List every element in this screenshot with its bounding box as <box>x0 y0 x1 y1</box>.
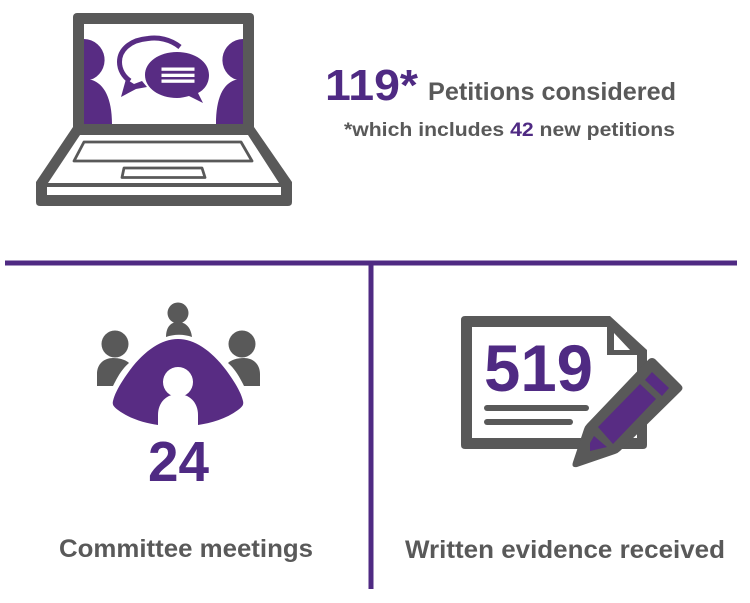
laptop base <box>36 127 292 206</box>
label: committee meetings: Committee meetings <box>59 535 313 563</box>
number: 119*: 119* <box>325 61 419 110</box>
number: 24: 24 <box>148 430 209 494</box>
vertical divider <box>368 263 374 589</box>
text lines <box>487 408 586 422</box>
number: 519: 519 <box>484 331 593 405</box>
pencil body <box>572 358 682 467</box>
icon: written evidence document and pencil <box>461 316 682 467</box>
speech bubble tail <box>121 79 147 97</box>
horizontal divider <box>5 260 737 266</box>
label: written evidence received: Written evidence received <box>405 536 725 564</box>
subheading: new petitions: *which includes 42 new petitions <box>344 119 675 141</box>
left person <box>97 330 129 386</box>
icon: committee meeting table <box>97 302 260 494</box>
meeting table <box>113 339 243 425</box>
filled speech bubble <box>145 52 209 103</box>
document <box>461 316 647 449</box>
icon: laptop with conversation <box>36 13 292 206</box>
trackpad outline <box>122 168 205 178</box>
laptop screen <box>84 24 243 124</box>
pencil eraser <box>645 372 669 396</box>
right person <box>216 39 243 124</box>
right person <box>228 330 260 386</box>
document fold <box>614 333 630 350</box>
left person <box>84 39 112 124</box>
pencil shaft <box>598 384 656 444</box>
top person <box>166 302 192 337</box>
front edge strip <box>47 187 281 195</box>
outline speech bubble <box>120 38 180 81</box>
keyboard outline <box>74 142 252 161</box>
keyboard deck <box>48 135 279 183</box>
document page <box>472 327 637 438</box>
label: petitions considered: Petitions considered <box>428 78 676 106</box>
laptop screen frame <box>73 13 254 135</box>
bubble text lines <box>162 68 194 83</box>
headline: petitions considered <box>325 61 676 110</box>
pencil tip <box>590 436 607 451</box>
seated person <box>158 367 198 426</box>
